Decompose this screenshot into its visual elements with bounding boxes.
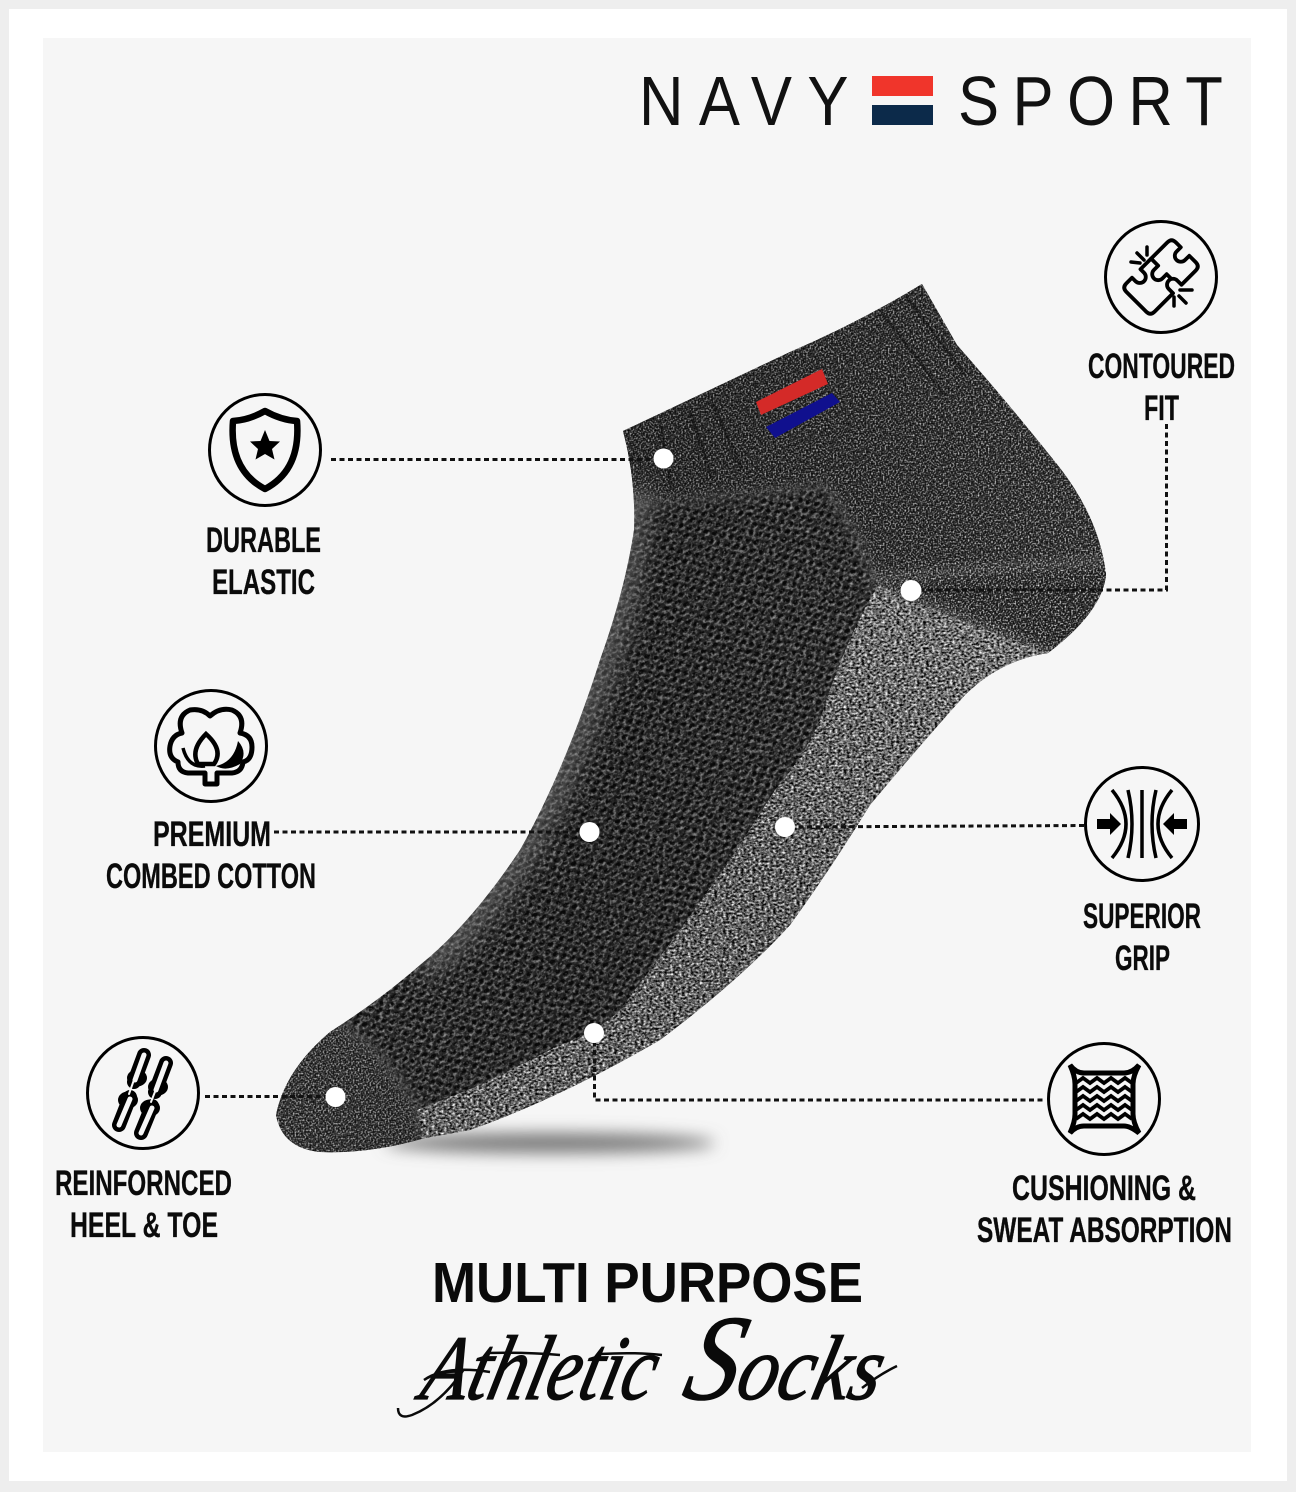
sock illustration <box>260 260 1130 1170</box>
callout dots <box>326 448 922 1107</box>
label: cushioning and sweat absorption <box>977 1169 1232 1250</box>
label: reinforced heel and toe <box>55 1164 232 1245</box>
sock toe <box>276 1020 424 1152</box>
label: contoured fit <box>1088 347 1235 428</box>
label: superior grip: GRIP <box>1115 939 1170 978</box>
label: cushioning and sweat absorption: CUSHIONING & <box>1012 1169 1196 1208</box>
label: reinforced heel and toe: REINFORNCED <box>55 1164 232 1203</box>
leader: cushioning <box>594 1033 1046 1100</box>
sock logo: red stripe <box>756 369 828 415</box>
leader: premium cotton <box>274 830 589 834</box>
dot: mesh <box>580 822 600 842</box>
dot: cuff <box>654 448 674 468</box>
label: durable elastic: ELASTIC <box>212 563 315 602</box>
label: premium combed cotton <box>106 815 316 896</box>
label: superior grip <box>1083 897 1201 978</box>
leader: contoured fit <box>911 424 1166 590</box>
feature: premium combed cotton <box>106 690 316 896</box>
label: premium combed cotton: PREMIUM <box>153 815 271 854</box>
dot: heel <box>900 580 922 601</box>
script subtitle: athletic socks <box>398 1291 903 1426</box>
feature: cushioning and sweat absorption <box>977 1044 1232 1250</box>
label: durable elastic <box>206 521 321 602</box>
icon: compression arrows <box>1086 768 1198 880</box>
subtitle word: socks: Socks <box>673 1291 903 1426</box>
leader: reinforced heel <box>205 1095 335 1098</box>
label: premium combed cotton: COMBED COTTON <box>106 857 316 896</box>
leader lines <box>205 424 1166 1100</box>
heading: multi purpose: MULTI PURPOSE <box>432 1251 863 1315</box>
icon: flag stripes <box>872 76 933 125</box>
feature: durable elastic <box>206 394 321 602</box>
label: superior grip: SUPERIOR <box>1083 897 1201 936</box>
subtitle word: athletic: Athletic <box>408 1318 670 1420</box>
leader: superior grip <box>785 826 1084 827</box>
label: durable elastic: DURABLE <box>206 521 321 560</box>
feature: contoured fit <box>1088 222 1235 428</box>
sock shadow <box>385 1133 715 1153</box>
dot: toe <box>326 1087 346 1107</box>
label: contoured fit: FIT <box>1144 389 1179 428</box>
brand word: navy: NAVY <box>639 61 848 140</box>
sock heel and cuff knit <box>623 284 1106 658</box>
icon: puzzle pieces <box>1106 222 1216 332</box>
feature: superior grip <box>1083 768 1201 978</box>
sock sole <box>417 585 1060 1150</box>
sock left edge highlight <box>420 490 634 965</box>
icon: shield with star <box>210 394 320 506</box>
subtitle swash: athletic <box>398 1353 662 1416</box>
icon: cotton boll <box>156 690 266 802</box>
sock shading <box>260 270 1120 1170</box>
dot: sole <box>584 1023 604 1043</box>
brand logo: Navy Sport <box>639 61 1223 140</box>
leader: durable elastic <box>331 458 660 461</box>
feature: reinforced heel and toe <box>55 1038 232 1245</box>
icon: pillow <box>1048 1044 1160 1154</box>
dot: arch <box>775 817 795 837</box>
subtitle swash: socks <box>862 1366 897 1388</box>
icon: chain links <box>88 1038 198 1148</box>
sock logo: blue stripe <box>766 393 840 438</box>
sock body: mesh upper <box>260 260 1130 1170</box>
label: reinforced heel and toe: HEEL & TOE <box>70 1206 218 1245</box>
cuff ribbing <box>660 295 965 490</box>
sock heel dark panel <box>872 554 1106 653</box>
brand word: sport: SPORT <box>958 61 1223 140</box>
